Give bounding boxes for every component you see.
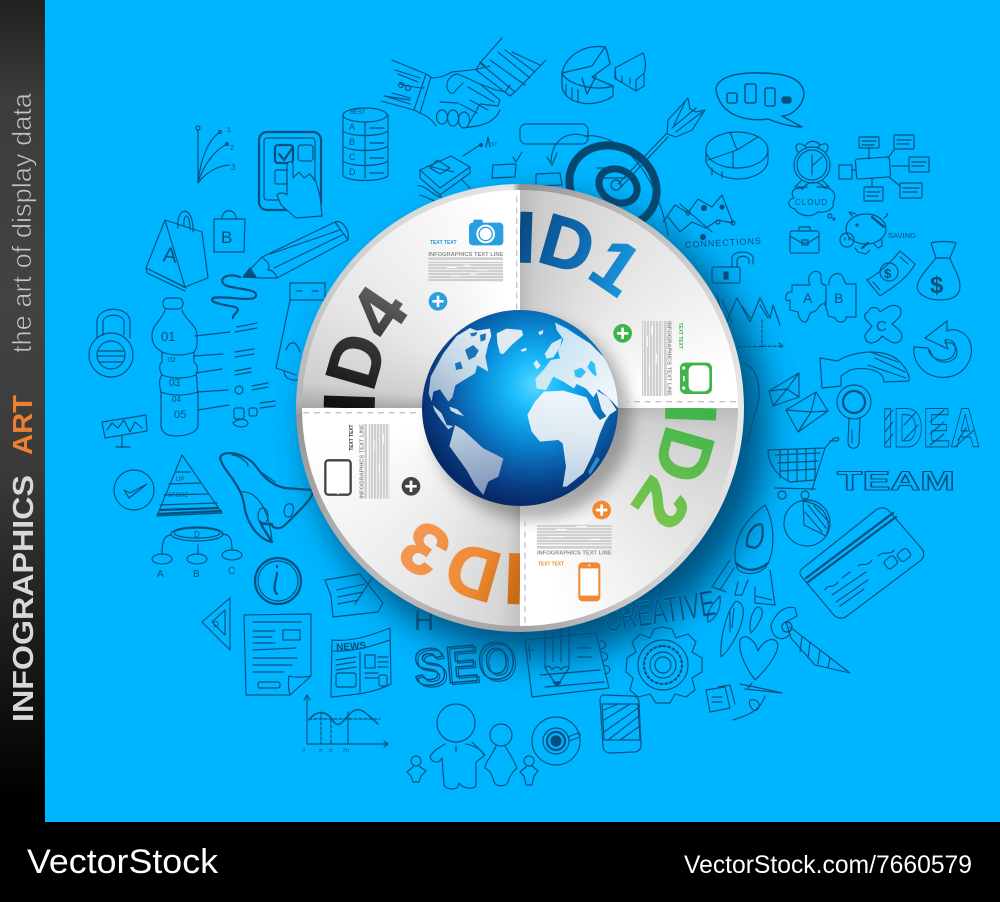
globe land: Africa <box>527 391 610 487</box>
doodle: database stack: BEST <box>350 110 366 116</box>
footer brand: VectorStock <box>27 843 219 881</box>
doodle: USB stick <box>276 283 332 380</box>
doodle: speech box and arrow <box>520 124 588 165</box>
doodle: pyramid <box>157 455 222 516</box>
doodle: books: ST <box>491 142 497 148</box>
doodle: family <box>407 704 538 789</box>
doodle: numbered bottle: 01 <box>161 329 175 344</box>
doodle: info circle <box>255 558 301 604</box>
doodle: curves chart: 2 <box>230 145 234 152</box>
doodle: open padlock <box>712 252 753 283</box>
doodle: puzzle piece C <box>865 305 902 343</box>
doodle: padlock <box>89 309 133 377</box>
doodle: circular arrow <box>914 321 971 377</box>
doodle: wave graph: 2π <box>343 748 350 754</box>
doodle: books <box>418 137 497 205</box>
doodle: hatching on IDEA <box>885 410 974 446</box>
doodle: arrow in target <box>618 98 705 187</box>
doodle: mountain line chart <box>717 295 783 348</box>
body text: INFOGRAPHICS TEXT LINE <box>537 551 612 557</box>
doodle: org chart: B <box>193 569 200 580</box>
doodle: org chart: A <box>157 569 164 580</box>
panel dividers <box>303 197 737 627</box>
doodle: database stack <box>343 108 388 180</box>
doodle: rocket <box>712 505 775 605</box>
doodle: cloud <box>789 182 835 220</box>
heading text: TEXT TEXT <box>349 424 355 451</box>
icon: globe <box>422 310 620 506</box>
doodle: check circle <box>114 470 154 510</box>
doodle: envelopes <box>769 373 828 432</box>
globe land: Central America <box>433 405 453 429</box>
body text: INFOGRAPHICS TEXT LINE <box>666 321 672 396</box>
doodle: credit card <box>800 508 924 618</box>
doodle: lightbulb <box>740 363 759 443</box>
heading text: TEXT TEXT <box>430 240 457 246</box>
doodle: coffee cup <box>532 717 580 765</box>
globe shadow <box>431 320 631 520</box>
doodle: word SAVING: SAVING <box>888 233 916 240</box>
globe land: Scandinavia <box>545 338 562 359</box>
doodle: pyramid: STORE <box>168 493 189 499</box>
doodle: magnifier <box>837 385 871 448</box>
doodle: word CREATIVE: CREATIVE <box>601 582 718 640</box>
sidebar title INFOGRAPHICS: INFOGRAPHICS <box>8 475 40 722</box>
doodle: presentation board <box>102 415 147 448</box>
icon: green plus <box>613 324 632 343</box>
footer url: VectorStock.com/7660579 <box>684 851 972 879</box>
doodle: money bag <box>917 242 960 300</box>
big label ID4: ID4 <box>324 286 408 408</box>
disc shadow <box>310 200 766 656</box>
doodle: numbered bottle: 05 <box>174 409 186 421</box>
icon: orange plus <box>592 501 611 519</box>
icon: blue plus <box>429 292 447 311</box>
doodle: SEO lettering: SEO <box>413 633 520 700</box>
doodle: document <box>244 614 311 695</box>
doodle: newspaper: NEWS <box>336 641 367 654</box>
doodle: archery target <box>555 130 671 242</box>
doodle: org chart: C <box>228 566 235 577</box>
doodle: briefcase <box>790 227 819 253</box>
doodles <box>89 38 980 789</box>
sidebar title ART: ART <box>7 395 38 455</box>
icon: tablet <box>325 460 351 495</box>
globe land: South America <box>449 425 503 495</box>
globe land: North America <box>429 328 491 402</box>
doodle: smartphone <box>600 695 641 753</box>
doodle: small boxes and tick <box>492 152 562 186</box>
body text: INFOGRAPHICS TEXT LINE <box>359 424 365 499</box>
doodle: curves chart: 1 <box>227 127 231 134</box>
panel: wheel disc <box>296 184 744 632</box>
globe land: Greenland <box>497 329 523 354</box>
doodle: newspaper <box>331 628 391 697</box>
doodle: 3D pie with slice <box>562 47 645 104</box>
doodle: banknote <box>867 251 915 296</box>
doodle: notepad with pen <box>325 574 383 617</box>
doodle: wave graph <box>302 695 388 754</box>
icon: orange phone <box>579 563 599 600</box>
doodle: puzzle pieces <box>786 271 856 322</box>
disc drop shadow and doodles layer <box>88 38 980 790</box>
icon: green phone landscape <box>680 363 712 394</box>
wheel details in zoomed coordinates <box>303 197 737 627</box>
doodle: notebook with pencil <box>525 622 610 697</box>
doodle: necktie <box>771 607 850 673</box>
doodle: wave graph: π <box>319 748 323 754</box>
heading text: TEXT TEXT <box>538 561 565 567</box>
big label ID3: ID3 <box>400 523 520 604</box>
doodle: wave graph: π <box>329 748 333 754</box>
doodle: curved arrow <box>820 352 909 388</box>
doodle: curves chart <box>196 126 236 183</box>
doodle: wave graph: 0 <box>302 748 305 754</box>
doodle: puzzle pieces: A <box>803 290 813 306</box>
doodle: flame drops <box>708 596 762 657</box>
icon: dark plus <box>402 477 420 496</box>
doodle: SEO lettering: SEO <box>411 631 518 698</box>
panel: bottom-left text <box>325 424 420 499</box>
doodle: handshake <box>381 38 546 128</box>
doodle: org chart: D <box>194 530 200 539</box>
doodle: database stack: A <box>349 122 355 132</box>
panel: top-right text <box>613 321 712 396</box>
doodle: shopping bag A: A <box>162 243 178 268</box>
doodle: speech bubble with bars <box>716 73 804 127</box>
doodle: pencil <box>243 221 348 278</box>
doodle: numbered bottle <box>152 298 275 436</box>
doodle: heart <box>740 637 778 680</box>
doodle: connection network <box>663 195 735 240</box>
globe land: Arabia <box>596 390 617 417</box>
doodle: piggy bank <box>840 212 888 254</box>
doodle: 3D pie <box>706 132 768 179</box>
doodle: database stack: D <box>349 167 356 177</box>
body text: INFOGRAPHICS TEXT LINE <box>428 252 504 258</box>
globe sea: Hudson bay <box>465 345 479 360</box>
doodle: database stack: B <box>349 137 355 147</box>
doodle: word TEAM: TEAM <box>837 466 955 496</box>
doodle: curves chart: 3 <box>231 163 236 172</box>
doodle: pie chart circle <box>784 500 830 546</box>
doodle: shopping bag B <box>214 211 245 252</box>
panel: bottom-right text <box>537 501 612 600</box>
doodle: shopping cart <box>768 437 839 499</box>
doodle: hand with notes <box>706 683 782 720</box>
doodle: alarm clock <box>794 141 830 187</box>
globe land: Iceland <box>521 348 527 352</box>
big label ID1: ID1 <box>520 212 636 298</box>
doodle: numbered bottle: 04 <box>172 395 181 404</box>
doodle: cloud: CLOUD <box>795 198 827 207</box>
doodle: triangle ruler <box>202 598 230 650</box>
globe land: Britain <box>533 360 541 369</box>
doodle: shopping bag B: B <box>221 228 232 247</box>
panel: top-left text <box>428 220 504 311</box>
globe sea: Black Sea and Caspian <box>574 361 597 378</box>
doodle: org chart <box>152 527 242 580</box>
doodle: money bag: $ <box>930 272 944 299</box>
doodle: puzzle piece C: C <box>876 318 887 335</box>
icon: camera <box>469 220 503 245</box>
globe sea: Mozambique channel <box>588 457 600 475</box>
doodle: shopping bag A <box>146 211 208 291</box>
doodle: banknote: $ <box>884 266 892 281</box>
doodle: word CONNECTIONS: CONNECTIONS <box>685 236 761 250</box>
doodle: word H: H <box>414 605 434 636</box>
doodle: triangle ruler: D <box>213 620 219 629</box>
doodle: numbered bottle: 03 <box>169 378 181 389</box>
doodle: puzzle pieces: B <box>834 290 843 306</box>
sidebar <box>0 0 45 822</box>
doodle: gear <box>626 627 702 703</box>
globe land: Eurasia <box>535 323 620 410</box>
globe sea: Canadian straits <box>455 332 486 370</box>
doodle: mind map <box>839 135 929 201</box>
doodle: database stack: C <box>349 152 356 162</box>
globe land: Cuba <box>449 407 464 416</box>
doodle: squiggle <box>212 275 256 318</box>
doodle: pyramid: UP <box>176 477 184 483</box>
heading text: TEXT TEXT <box>677 323 683 349</box>
doodle: tablet with hand <box>259 132 322 218</box>
doodle: numbered bottle: 02 <box>168 357 176 364</box>
globe land: Svalbard <box>538 330 543 335</box>
sidebar tagline: the art of display data <box>7 92 37 353</box>
big label ID2: ID2 <box>630 408 716 528</box>
doodle: plane <box>220 453 313 542</box>
